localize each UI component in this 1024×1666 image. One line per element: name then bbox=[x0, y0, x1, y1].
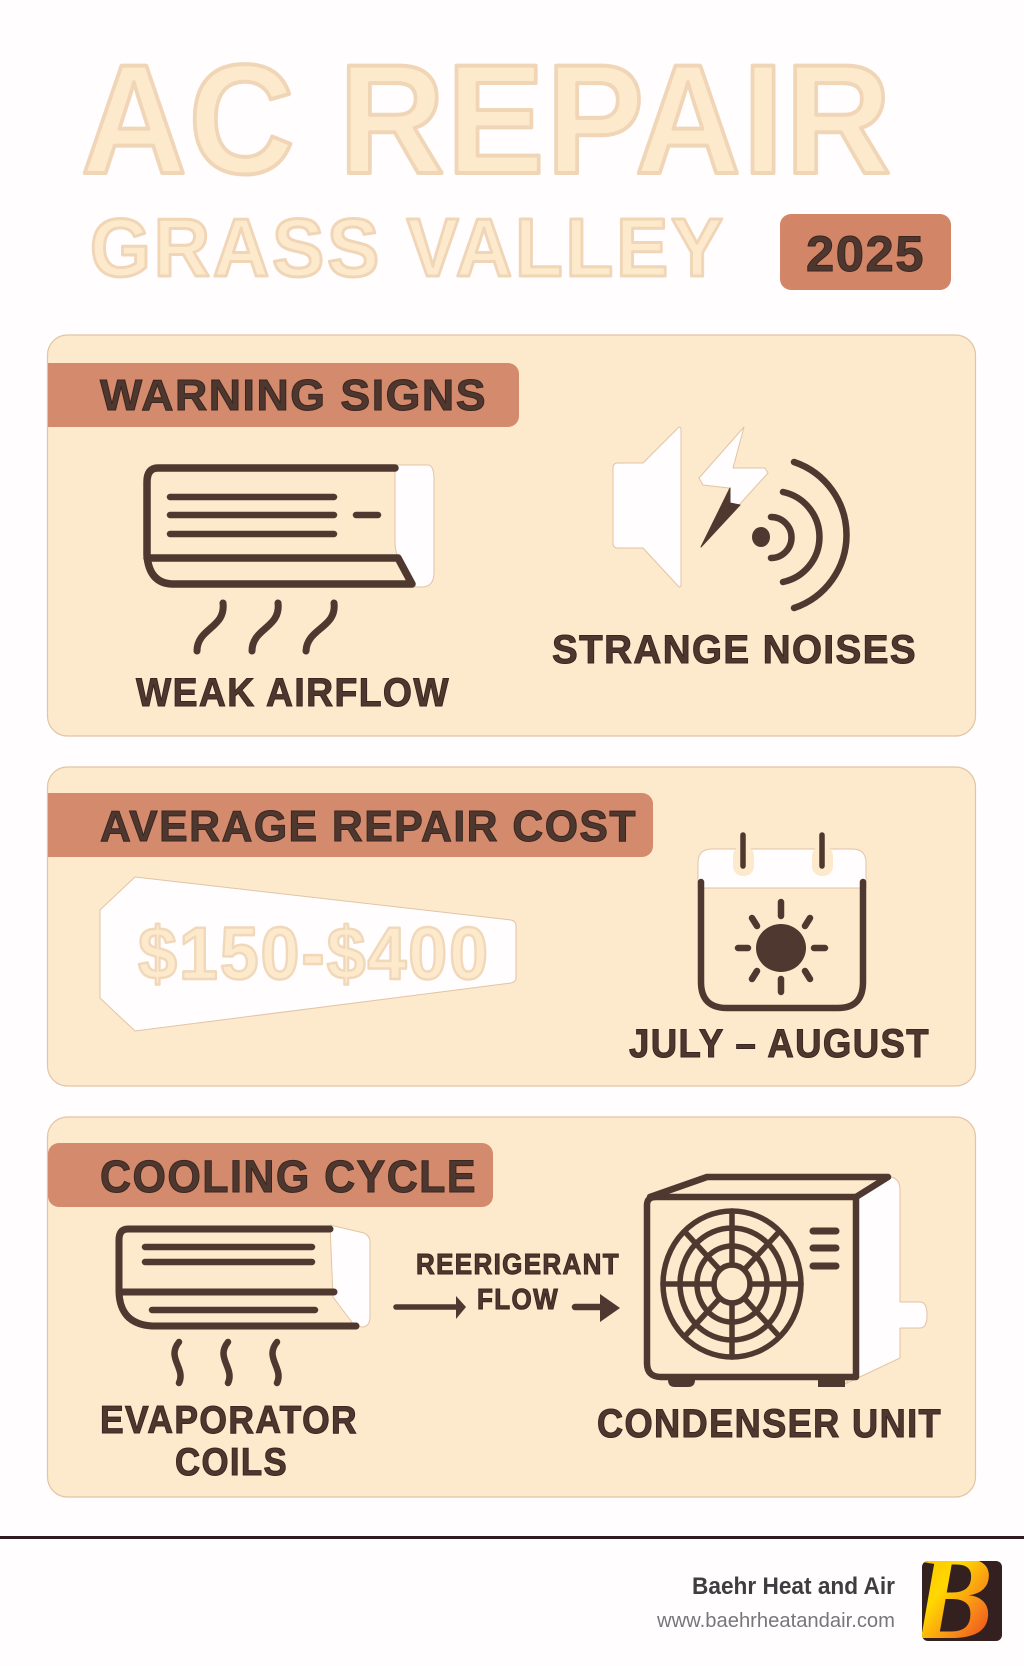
label: weak airflow: WEAK AIRFLOW bbox=[136, 671, 450, 715]
label: july august: JULY – AUGUST bbox=[629, 1022, 930, 1066]
heading: warning signs bbox=[48, 363, 519, 427]
arrow: flow to condenser bbox=[575, 1294, 620, 1322]
icon: strange noises speaker and bolt bbox=[613, 427, 847, 608]
footer divider bbox=[0, 1536, 1024, 1539]
label: refrigerant flow: REERIGERANT bbox=[416, 1249, 620, 1281]
arrow: flow to label bbox=[396, 1296, 466, 1319]
footer: company name: Baehr Heat and Air bbox=[692, 1573, 895, 1600]
label: condenser unit: CONDENSER UNIT bbox=[597, 1402, 942, 1446]
cost plaque: $150-$400 bbox=[138, 912, 490, 995]
panel: warning signs bbox=[48, 335, 976, 736]
cost plaque bbox=[100, 877, 516, 1031]
subtitle: GRASS VALLEY: GRASS VALLEY bbox=[90, 201, 726, 294]
icon: condenser unit bbox=[647, 1177, 927, 1385]
heading: warning signs: WARNING SIGNS bbox=[100, 371, 487, 420]
label: refrigerant flow: FLOW bbox=[477, 1284, 559, 1316]
heading: cooling cycle: COOLING CYCLE bbox=[100, 1151, 477, 1202]
panel: average repair cost bbox=[48, 767, 976, 1086]
logo bbox=[922, 1561, 1002, 1641]
label: evaporator coils: EVAPORATOR bbox=[100, 1399, 358, 1442]
heading: average repair cost: AVERAGE REPAIR COST bbox=[100, 802, 637, 851]
label: refrigerant flow bbox=[416, 1249, 620, 1316]
label: evaporator coils bbox=[100, 1399, 358, 1484]
icon: calendar with sun bbox=[698, 835, 866, 1008]
year badge: 2025: 2025 bbox=[806, 226, 925, 282]
title: AC REPAIR: AC REPAIR bbox=[81, 33, 893, 207]
heading: average repair cost bbox=[48, 793, 653, 857]
label: strange noises: STRANGE NOISES bbox=[552, 628, 917, 672]
panel: cooling cycle bbox=[48, 1117, 976, 1497]
label: evaporator coils: COILS bbox=[175, 1441, 288, 1484]
footer: website: www.baehrheatandair.com bbox=[656, 1610, 895, 1632]
icon: weak airflow AC unit bbox=[147, 465, 434, 651]
year badge: 2025 bbox=[780, 214, 951, 290]
logo: B bbox=[910, 1530, 993, 1665]
icon: evaporator indoor unit bbox=[119, 1225, 370, 1383]
